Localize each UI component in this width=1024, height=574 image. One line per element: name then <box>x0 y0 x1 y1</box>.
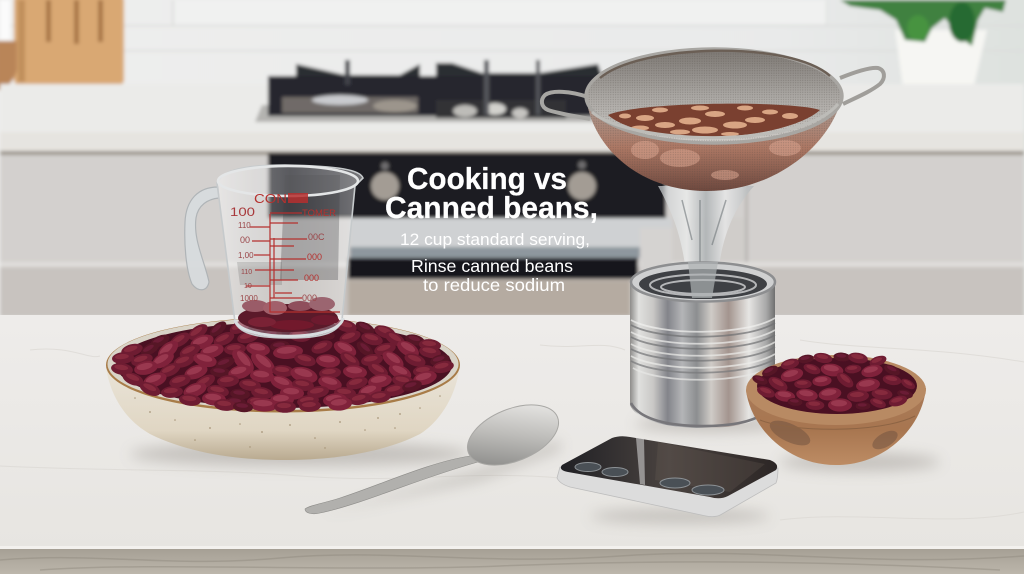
serving spoon <box>305 393 567 514</box>
plate speckles <box>134 395 441 449</box>
water stream <box>658 186 754 300</box>
scale buttons <box>575 462 724 495</box>
cup labels <box>230 191 337 303</box>
ceramic plate body <box>106 362 460 460</box>
title: Cooking vs <box>407 161 567 196</box>
cup labels: 00 <box>240 235 250 245</box>
title: Canned beans, <box>385 190 598 225</box>
cup labels: 00C <box>308 232 325 242</box>
cabinets <box>0 155 1024 317</box>
plate of kidney beans <box>106 317 460 460</box>
beans in cup <box>238 297 339 332</box>
back countertop <box>0 84 1024 156</box>
bowl body <box>746 388 926 465</box>
cup base <box>235 318 343 336</box>
cup inner shadow reflection <box>280 175 340 280</box>
cup rim <box>218 166 358 196</box>
right handle <box>840 68 884 104</box>
cup handle <box>185 187 219 290</box>
cup labels: TOMER <box>302 208 337 218</box>
serving subtitle: 12 cup standard serving, <box>400 230 590 249</box>
wall tile lines <box>0 0 1024 52</box>
empty tin can <box>630 262 775 428</box>
strainer mesh bowl <box>588 104 840 191</box>
cup measurement markings <box>246 213 340 312</box>
cup labels: 10 <box>244 283 252 290</box>
liquid and beans inside strainer <box>608 104 820 137</box>
cup labels: 000 <box>307 252 322 262</box>
cup body <box>217 165 363 338</box>
can ribs <box>631 318 775 380</box>
cup labels: 110 <box>238 221 251 230</box>
scale glass top <box>561 436 777 498</box>
object shadows <box>130 416 940 523</box>
cup labels: 1,00 <box>238 251 254 260</box>
digital kitchen scale <box>557 436 778 517</box>
blurred kitchen background <box>0 0 1024 330</box>
bowl dark patina <box>766 416 901 453</box>
strainer inner wall <box>587 50 841 142</box>
left window and wooden bowl <box>0 0 17 90</box>
title and message text <box>385 161 598 295</box>
cup labels: 100 <box>230 205 255 219</box>
gas stove <box>255 60 613 122</box>
cup labels: CON <box>254 191 287 206</box>
glass measuring cup <box>185 165 363 338</box>
cutting board <box>14 0 124 85</box>
plant pot and leaves <box>840 0 1006 97</box>
oven <box>268 153 744 316</box>
metal strainer <box>542 49 884 191</box>
cup labels: 000 <box>304 273 319 283</box>
scale body <box>557 467 778 517</box>
can body <box>630 282 775 428</box>
rinse tip: Rinse canned beans <box>411 256 573 276</box>
left handle <box>542 92 590 119</box>
rinsed beans below rim <box>631 140 801 180</box>
cup labels: 000 <box>302 293 317 303</box>
can opening <box>631 262 775 302</box>
beans on plate <box>110 317 455 413</box>
marble counter <box>0 315 1024 574</box>
rinse tip: to reduce sodium <box>423 275 565 295</box>
cup labels: 1000 <box>240 294 258 303</box>
cup labels: 110 <box>241 269 252 276</box>
terracotta bowl of beans <box>746 351 926 465</box>
spoon bowl <box>459 393 567 477</box>
strainer rim <box>586 49 842 143</box>
beans in bowl <box>751 351 917 412</box>
rinse tip <box>411 256 573 295</box>
title <box>385 161 598 225</box>
bowl rim <box>746 355 926 425</box>
can bottom seam <box>631 402 775 426</box>
spoon handle <box>305 456 478 514</box>
plate rim <box>106 318 460 412</box>
